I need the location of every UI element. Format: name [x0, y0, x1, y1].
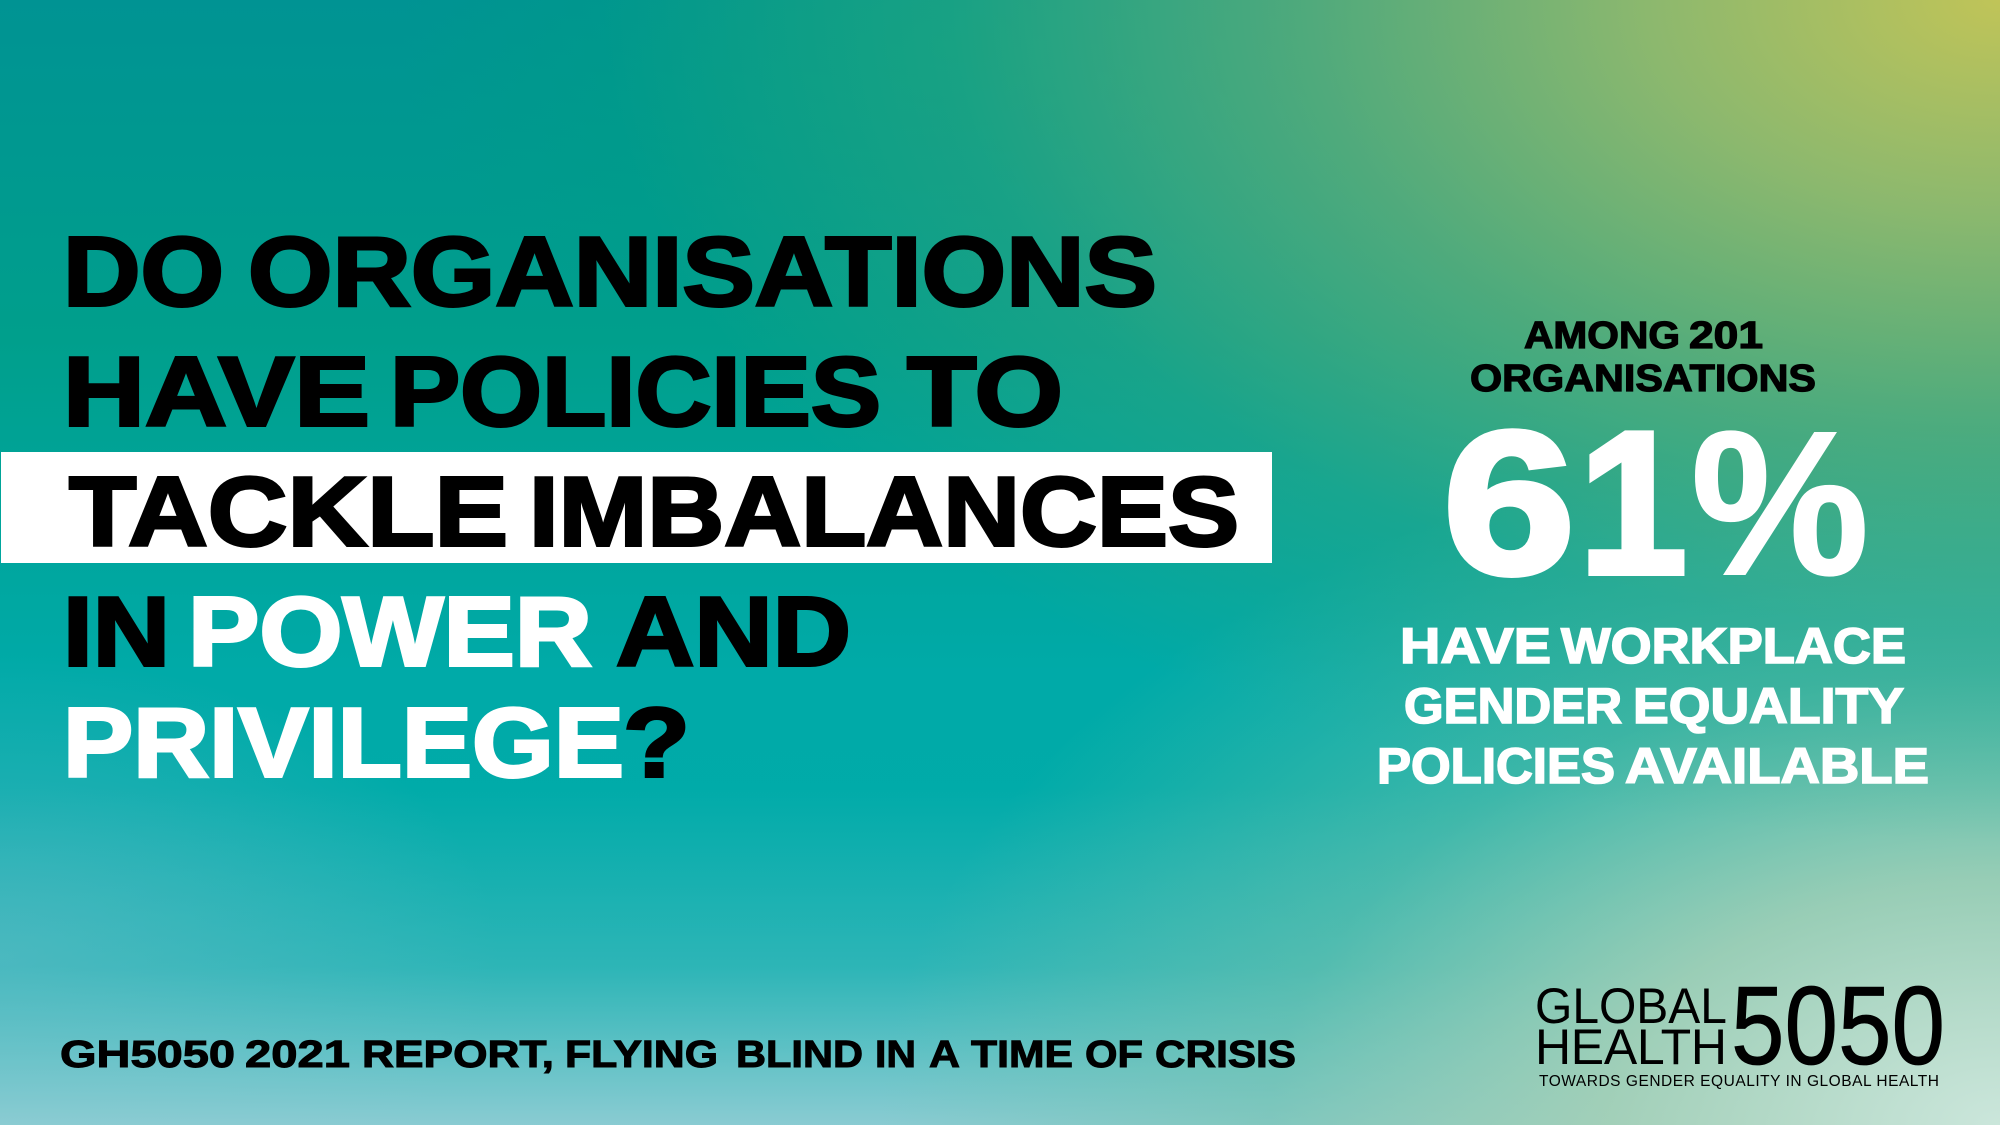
sample size label: AMONG	[1524, 315, 1680, 357]
main heading	[63, 216, 1239, 798]
main heading: POLICIES	[390, 336, 881, 446]
sample size label: 201	[1689, 315, 1763, 357]
logo: Global Health 5050: 5050	[1731, 964, 1945, 1088]
statistic description: AVAILABLE	[1625, 738, 1929, 794]
source line: OF	[1085, 1034, 1143, 1076]
main heading: ORGANISATIONS	[248, 216, 1157, 326]
logo: Global Health 5050: TOWARDS GENDER EQUALITY IN GLOBAL HEALTH	[1539, 1073, 1939, 1090]
big statistic 61%: 1	[1579, 390, 1687, 617]
main heading: AND	[616, 576, 851, 686]
sample size label	[1470, 315, 1816, 400]
main heading: POWER	[188, 576, 592, 686]
source line: TIME	[971, 1034, 1073, 1076]
logo: Global Health 5050: GLOBAL	[1535, 978, 1727, 1034]
logo: Global Health 5050	[1535, 964, 1945, 1090]
statistic description: WORKPLACE	[1561, 618, 1906, 674]
source line: FLYING	[565, 1034, 718, 1076]
main heading: IN	[63, 576, 170, 686]
source line: CRISIS	[1155, 1034, 1296, 1076]
statistic description: POLICIES	[1377, 738, 1615, 794]
big statistic 61%	[1443, 389, 1869, 618]
big statistic 61%: %	[1691, 389, 1869, 618]
main heading: PRIVILEGE	[63, 688, 624, 798]
statistic description: EQUALITY	[1633, 678, 1904, 734]
main heading: ?	[623, 688, 690, 798]
source line: GH5050	[60, 1034, 235, 1076]
source line	[60, 1034, 1296, 1076]
main heading: TACKLE	[69, 456, 508, 566]
statistic description: HAVE	[1400, 618, 1551, 674]
logo: Global Health 5050: HEALTH	[1535, 1019, 1727, 1075]
statistic description	[1377, 618, 1929, 794]
big statistic 61%: 6	[1443, 390, 1575, 617]
sample size label: ORGANISATIONS	[1470, 358, 1816, 400]
statistic description: GENDER	[1404, 678, 1622, 734]
main heading: TO	[907, 336, 1063, 446]
main heading: IMBALANCES	[529, 456, 1239, 566]
main heading: HAVE	[63, 336, 370, 446]
source line: IN	[875, 1034, 916, 1076]
main heading: DO	[63, 216, 224, 326]
source line: REPORT,	[362, 1034, 554, 1076]
source line: BLIND	[736, 1034, 863, 1076]
highlight bar	[1, 452, 1272, 563]
source line: 2021	[245, 1034, 350, 1076]
source line: A	[929, 1034, 960, 1076]
